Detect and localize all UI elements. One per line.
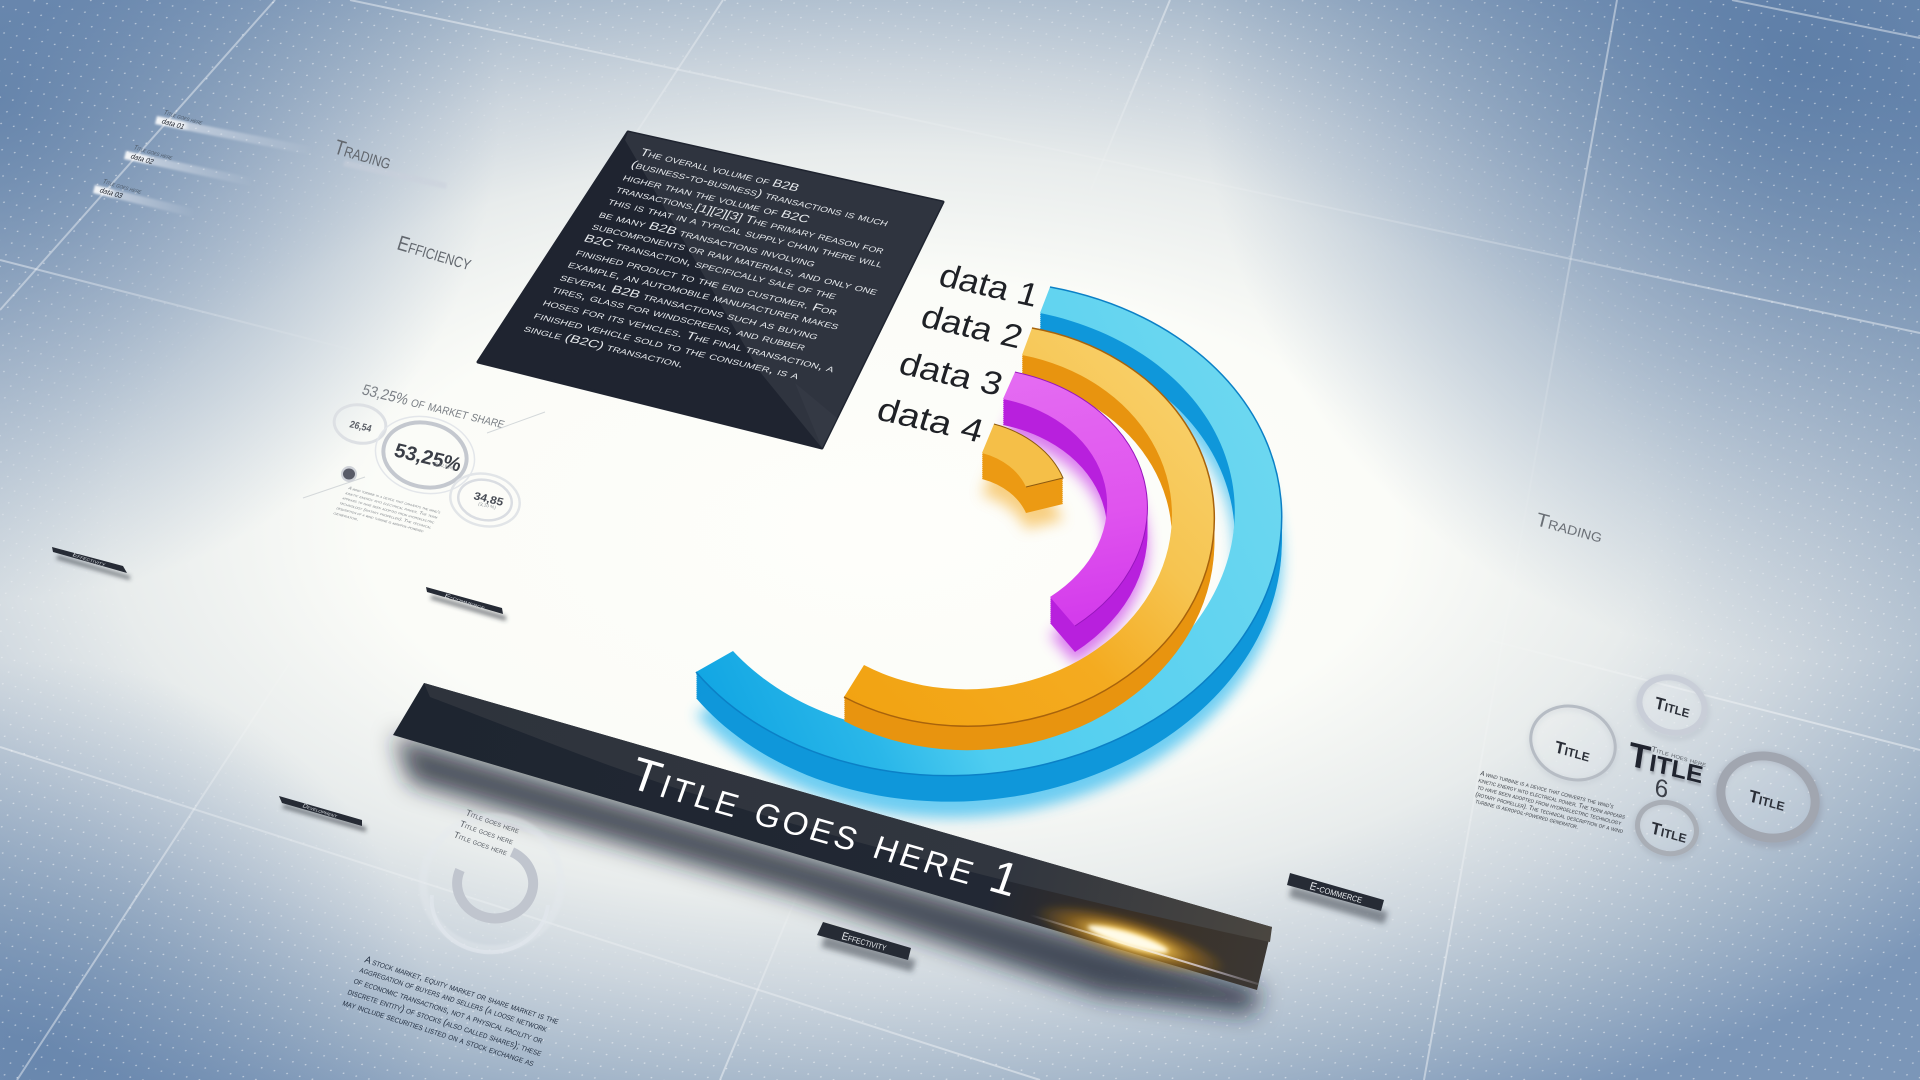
ring titles: Title goes here xyxy=(452,830,509,857)
tag: Effectivity left xyxy=(52,547,130,580)
tag: E-commerce left xyxy=(426,587,506,621)
tag: Development xyxy=(279,796,366,832)
card paragraph: finished vehicle sold to the consumer, is a xyxy=(531,310,802,382)
ring: bottom xyxy=(1629,794,1705,865)
tag: E-commerce left: E-commerce xyxy=(443,594,486,611)
faint rings xyxy=(423,817,561,952)
ring titles xyxy=(452,808,521,857)
card paragraph: several B2B transactions such as buying xyxy=(557,272,821,342)
text block: stock market paragraph: of economic transactions, not a physical facility or xyxy=(352,976,545,1046)
panel: market share xyxy=(303,382,545,533)
card paragraph: example, an automobile manufacturer makes xyxy=(565,259,841,332)
heading: Trading left: Trading xyxy=(331,136,394,174)
ring titles: Title goes here xyxy=(464,808,521,835)
panel: Title 6 cluster xyxy=(1474,669,1829,865)
ring: data 3 purple xyxy=(1003,372,1147,652)
text block: stock market paragraph: aggregation of buyers and sellers (a loose network xyxy=(358,965,549,1035)
progress bars: data 01, 02, 03 xyxy=(93,110,313,217)
ring: data 4 yellow xyxy=(982,424,1063,513)
title text: Title goes here 1 xyxy=(624,747,1026,906)
bar: data 01: data 01 xyxy=(160,117,187,131)
soft reflections xyxy=(696,329,1282,818)
card paragraph: (business-to-business) transactions is much xyxy=(628,159,891,229)
tag: E-commerce right: E-commerce xyxy=(1308,880,1364,906)
card paragraph: hoses for its vehicles. The final transaction, a xyxy=(540,297,838,375)
market share paragraph: A wind turbine is a device that converts the wind's xyxy=(347,486,442,515)
card paragraph: The overall volume of B2B xyxy=(637,147,802,194)
card paragraph: be many B2B transactions involving xyxy=(596,209,818,270)
lens flare xyxy=(1029,890,1258,990)
tag: Development: Development xyxy=(301,804,339,820)
ring: left: Title xyxy=(1553,737,1592,766)
market share paragraph: appears to have been adopted from hydroelectric xyxy=(341,496,437,525)
card paragraph: higher than the volume of B2C xyxy=(620,172,812,226)
card paragraph: transactions.[1][2][3] The primary reason for xyxy=(613,184,887,257)
bar: data 02 xyxy=(124,145,253,186)
card paragraph: B2C transaction, specifically sale of the xyxy=(581,233,839,302)
centre title: Title xyxy=(1627,738,1706,794)
bullet dot xyxy=(341,466,357,482)
card paragraph: finished product to the end customer. For xyxy=(573,247,840,318)
centre title: 6 xyxy=(1653,773,1670,804)
panel: bottom-left ring and titles xyxy=(423,808,561,952)
card paragraph: tires, glass for windscreens, and rubber xyxy=(549,284,808,353)
ring: right: Title xyxy=(1747,786,1787,815)
tag: Effectivity centre xyxy=(817,922,916,972)
ring: left xyxy=(1520,694,1626,794)
text block: stock market paragraph: may include securities listed on a stock exchange as xyxy=(341,998,536,1069)
ring: top: Title xyxy=(1653,693,1692,722)
bar: data 02: Title goes here xyxy=(132,145,174,162)
ring: data 1 blue xyxy=(696,287,1282,802)
card paragraph: this is that in a typical supply chain there will xyxy=(605,196,886,270)
cluster paragraph: kinetic energy into electrical power. The term appears xyxy=(1477,777,1627,821)
bar: data 03: data 03 xyxy=(98,186,125,200)
tag: Effectivity centre: Effectivity xyxy=(840,930,889,954)
ring: top xyxy=(1630,669,1714,746)
cluster paragraph: (rotary propeller). The technical description of a wind xyxy=(1474,791,1624,835)
market share paragraph: kinetic energy into electrical power. The term xyxy=(344,491,439,520)
market share paragraph: generator. xyxy=(332,511,360,522)
market share paragraph: description of a wind turbine is aerofoil-powered xyxy=(335,506,426,533)
card paragraph xyxy=(521,147,891,382)
title bar shadow xyxy=(394,735,1261,1014)
circle: 53,25% xyxy=(368,407,482,503)
label: data 3: data 3 xyxy=(895,344,1007,403)
circle: 34,85: (3,10 %) xyxy=(478,501,497,510)
text block: stock market paragraph xyxy=(341,955,561,1069)
tag: E-commerce right xyxy=(1287,873,1388,924)
chart: 3D radial bar chart xyxy=(696,256,1282,818)
label: data 4: data 4 xyxy=(873,390,988,449)
bar: data 03 xyxy=(93,179,195,217)
label: data 1: data 1 xyxy=(935,256,1044,314)
ring: right xyxy=(1707,743,1829,857)
market share heading: 53,25% of market share xyxy=(360,382,507,432)
circle: 26,54: 26,54 xyxy=(348,419,373,435)
circle: 34,85 xyxy=(445,467,525,533)
heading: Efficiency: Efficiency xyxy=(394,232,474,275)
ring arc xyxy=(457,852,533,918)
circle: 53,25%: 53,25% xyxy=(391,440,464,476)
card paragraph: single (B2C) transaction. xyxy=(521,323,686,370)
tag: Effectivity left: Effectivity xyxy=(71,553,107,568)
bar: data 01: Title goes here xyxy=(162,110,204,127)
cluster paragraph xyxy=(1474,770,1627,835)
bar: data 03: Title goes here xyxy=(101,179,143,196)
cluster paragraph: A wind turbine is a device that converts the wind's xyxy=(1479,770,1615,811)
card paragraph: subcomponents or raw materials, and only one xyxy=(589,221,880,298)
ring: data 2 orange xyxy=(844,328,1214,750)
centre title: Title xyxy=(1626,735,1706,791)
market share paragraph: technology (rotary propeller). The technical xyxy=(338,501,433,530)
title bar xyxy=(393,683,1272,990)
centre title: Title hoes here xyxy=(1651,744,1708,769)
text block: stock market paragraph: A stock market, equity market or share market is the xyxy=(363,955,561,1027)
circle: 53,25%: (3,10,90%) xyxy=(432,461,456,472)
panel: dark text card xyxy=(478,132,943,448)
ring titles: Title goes here xyxy=(458,819,515,846)
text block: stock market paragraph: discrete entity) of stocks (also called shares); these xyxy=(346,987,544,1059)
ring: bottom: Title xyxy=(1649,818,1689,847)
cluster paragraph: to have been adopted from hydroelectric technology xyxy=(1476,784,1623,827)
circle: 26,54 xyxy=(331,401,389,447)
cluster paragraph: turbine is aerofoil-powered generator. xyxy=(1474,798,1579,831)
circle: 34,85: 34,85 xyxy=(472,490,505,509)
bar: data 01 xyxy=(155,110,313,155)
market share paragraph xyxy=(332,486,442,533)
label: data 2: data 2 xyxy=(917,297,1027,355)
heading: Trading left xyxy=(331,136,447,189)
bar: data 02: data 02 xyxy=(129,152,156,166)
heading: Trading right: Trading xyxy=(1534,509,1605,548)
